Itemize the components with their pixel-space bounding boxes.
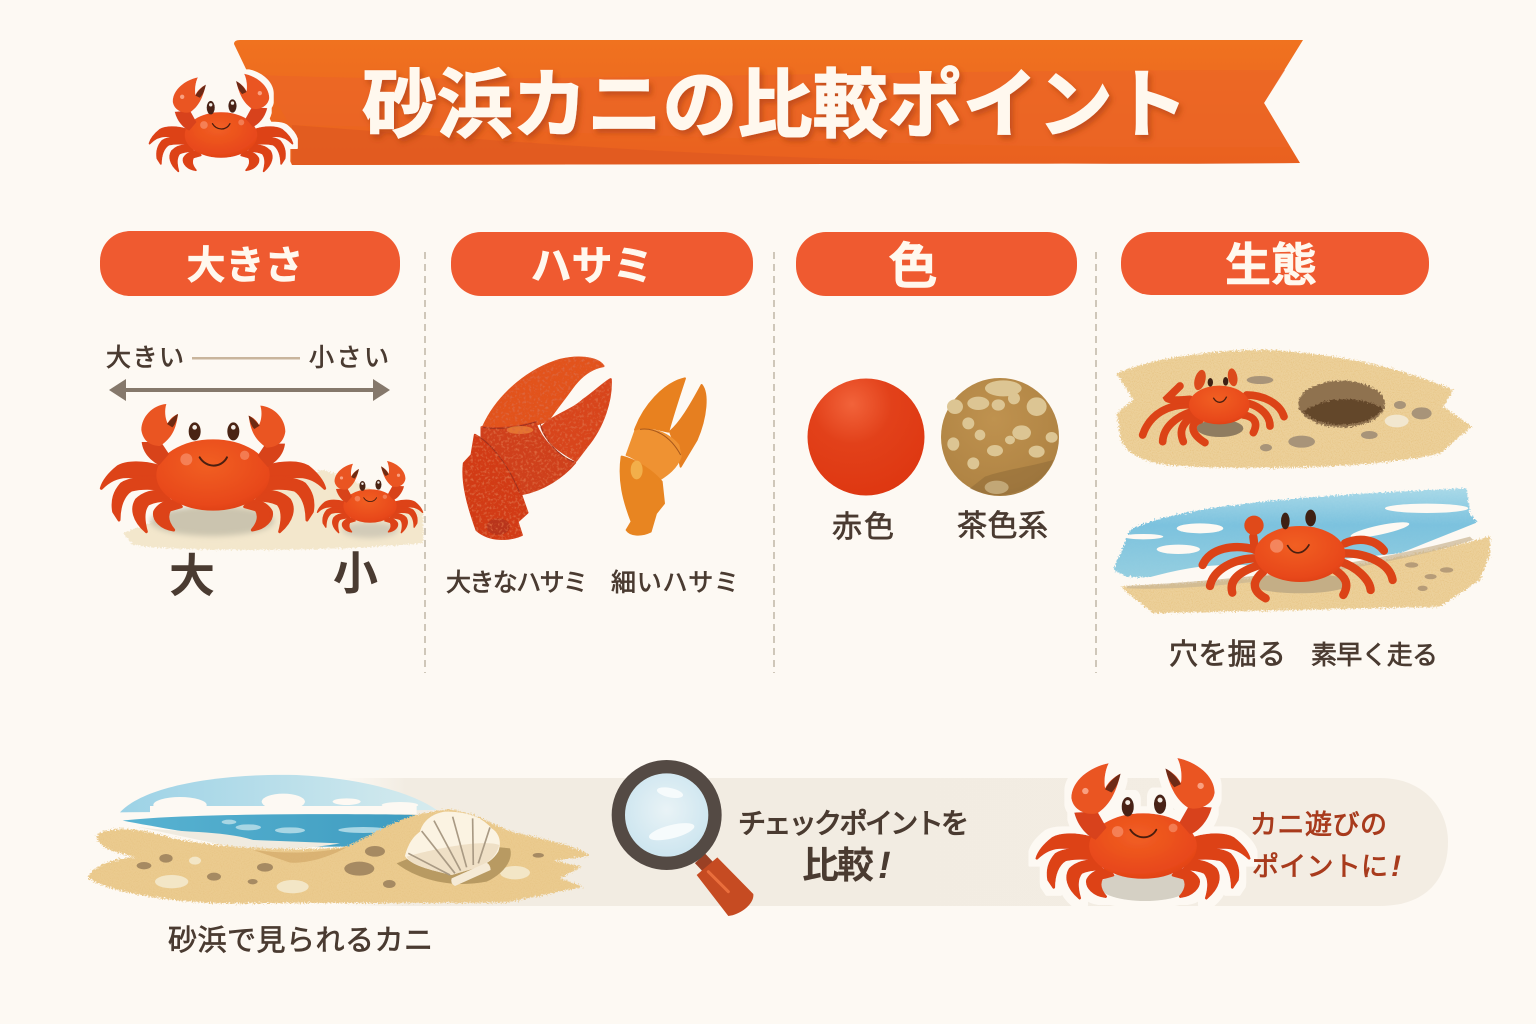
heading: colour xyxy=(796,232,1077,296)
heading: colour: 色 xyxy=(888,240,938,294)
icon: small crab xyxy=(318,461,422,538)
text: check points: ! xyxy=(878,845,891,887)
heading: ecology xyxy=(1121,232,1429,295)
text: check points: 比較 xyxy=(802,845,874,886)
text: check points xyxy=(738,808,969,887)
label: brown: 茶色系 xyxy=(957,510,1048,543)
dividers xyxy=(425,252,1096,673)
arrow: size range xyxy=(109,379,390,401)
heading: ecology: 生態 xyxy=(1225,239,1317,291)
title banner xyxy=(234,40,1303,165)
panel: size xyxy=(100,231,423,602)
label: slim claw: 細いハサミ xyxy=(611,569,739,597)
panel: colour xyxy=(796,232,1077,544)
icon: large claw xyxy=(464,358,611,539)
text: crab play points: カニ遊びの xyxy=(1250,810,1387,840)
text: crab play points: ポイントに xyxy=(1252,852,1388,882)
text: crab play points: ! xyxy=(1391,850,1401,883)
scene: digging crab xyxy=(1117,350,1472,468)
size scale labels: 大きい xyxy=(106,344,184,372)
label: small: 小 xyxy=(333,548,378,599)
sand patch xyxy=(123,470,423,550)
heading: claws: ハサミ xyxy=(530,243,654,289)
text: crab play points xyxy=(1250,810,1401,883)
bottom band xyxy=(340,778,1448,906)
heading: claws xyxy=(451,232,753,296)
icon: scallop shell xyxy=(397,812,511,886)
heading: size: 大きさ xyxy=(186,245,304,288)
label: red: 赤色 xyxy=(832,511,894,544)
swatch: red xyxy=(808,378,924,496)
panel: claws xyxy=(446,232,753,597)
size scale labels: 小さい xyxy=(309,344,389,372)
text: check points: チェックポイントを xyxy=(738,808,969,839)
title text: 砂浜カニの比較ポイント xyxy=(362,63,1188,147)
label: run: 素早く走る xyxy=(1311,640,1438,670)
icon: large crab xyxy=(101,404,325,536)
icon: title crab xyxy=(150,74,292,171)
icon: slim claw xyxy=(621,378,706,535)
swatch: brown xyxy=(941,378,1059,496)
illustration: beach and shell xyxy=(88,775,590,903)
label: dig: 穴を掘る xyxy=(1169,638,1286,671)
size scale labels xyxy=(106,344,389,372)
scene: running crab on shore xyxy=(1113,488,1490,613)
icon: smiling crab xyxy=(1037,758,1249,901)
caption: sandy beach: 砂浜で見られるカニ xyxy=(168,924,433,957)
panel: ecology xyxy=(1113,232,1490,671)
label: large: 大 xyxy=(169,550,215,602)
label: large claw: 大きなハサミ xyxy=(446,569,588,597)
heading: size xyxy=(100,231,400,296)
icon: magnifying glass xyxy=(618,767,753,916)
